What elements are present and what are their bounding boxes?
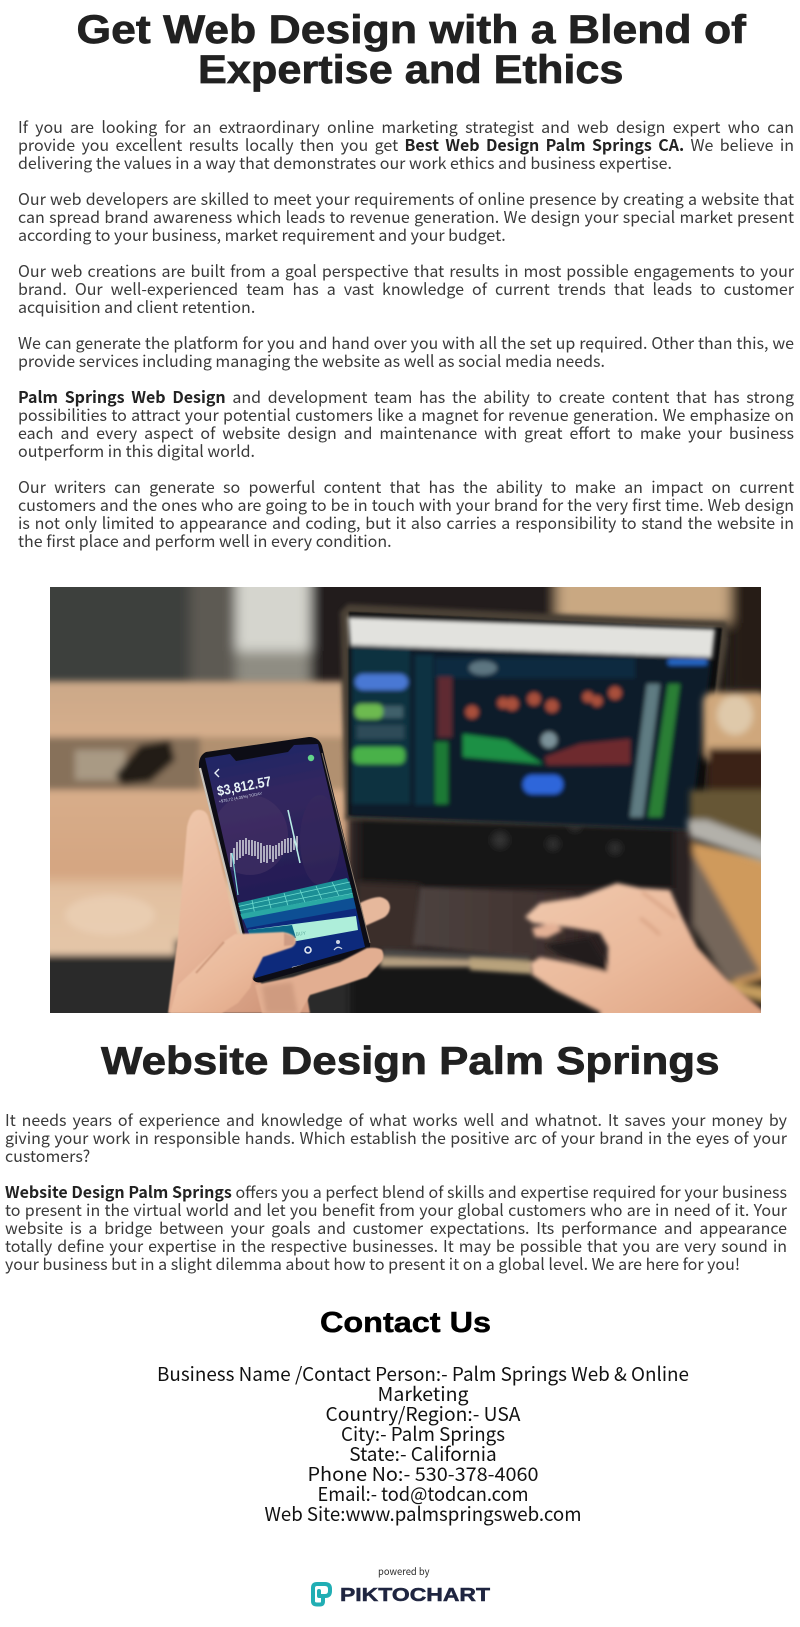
paragraph: writers — [18, 474, 794, 552]
phone screen details — [205, 744, 365, 978]
contact details: Web Site:www.palmspringsweb.com — [264, 1500, 582, 1527]
paragraph: web creations: Our web creations are built from a goal perspective that results in most possible engagements to your — [18, 258, 794, 282]
contact details: Phone No:- 530-378-4060 — [308, 1460, 538, 1487]
thumb and fingers — [170, 932, 384, 1013]
paragraph: writers: customers and the ones who are going to be in touch with your brand for the very first time. Web design — [18, 492, 794, 516]
paragraph: intro: delivering the values in a way that demonstrates our work ethics and business expertise. — [18, 150, 672, 174]
paragraph: palm springs web design: Palm Springs Web Design and development team has the ability to create content that has strong — [18, 384, 794, 408]
right hand — [525, 883, 765, 1020]
title: Expertise and Ethics — [198, 48, 624, 92]
photo background — [30, 567, 780, 1025]
phone: +$78,72 (4.35%) TODAY — [218, 791, 263, 804]
paragraph: web developers: can spread brand awareness which leads to revenue generation. We design your special market present — [18, 204, 794, 228]
icon: piktochart mark — [313, 1584, 330, 1604]
paragraph: intro: If you are looking for an extraordinary online marketing strategist and web design expert who can — [18, 114, 794, 138]
paragraph: perfect blend — [5, 1179, 787, 1275]
paragraph: perfect blend: totally define your expertise in the respective businesses. It may be possible that you are very sound in — [5, 1233, 787, 1257]
jar and silver device — [687, 692, 775, 866]
photo: phone with trading app in front of laptop — [50, 587, 761, 1013]
paragraph: web developers: Our web developers are skilled to meet your requirements of online presence by creating a website that — [18, 186, 794, 210]
powered by piktochart logo: powered by — [378, 1563, 430, 1578]
phone: BUY — [295, 931, 307, 938]
paragraph: web developers — [18, 186, 794, 246]
title: Get Web Design with a Blend of — [76, 8, 747, 52]
contact details — [157, 1360, 689, 1527]
contact details: State:- California — [349, 1440, 497, 1467]
paragraph: perfect blend: your business but in a slight dilemma about how to present it on a global level. We are here for you! — [5, 1251, 740, 1275]
heading: contact us: Contact Us — [320, 1307, 491, 1339]
paragraph: palm springs web design: possibilities to attract your potential customers like a magnet for revenue generation. We emphasize on — [18, 402, 794, 426]
contact details: City:- Palm Springs — [341, 1420, 505, 1447]
heading: website design palm springs: Website Design Palm Springs — [101, 1040, 720, 1083]
contact details: Email:- tod@todcan.com — [318, 1480, 528, 1507]
paragraph: web creations — [18, 258, 794, 318]
powered by piktochart logo: PIKTOCHART — [340, 1584, 491, 1605]
paragraph: writers: the first place and perform well in every condition. — [18, 528, 392, 552]
paragraph: perfect blend: website is a bridge between your goals and customer expectations. Its performance and appearance — [5, 1215, 787, 1239]
paragraph: web creations: brand. Our well-experienced team has a vast knowledge of current trends that leads to customer — [18, 276, 794, 300]
paragraph: perfect blend: Website Design Palm Springs offers you a perfect blend of skills and expertise required for your business — [5, 1179, 787, 1203]
paragraph: web creations: acquisition and client retention. — [18, 294, 255, 318]
title — [76, 8, 747, 92]
paragraph: palm springs web design: outperform in this digital world. — [18, 438, 255, 462]
paragraph: platform: We can generate the platform for you and hand over you with all the set up required. Other than this, we — [18, 330, 794, 354]
contact details: Business Name /Contact Person:- Palm Springs Web & Online — [157, 1360, 689, 1387]
paragraph: intro: provide you excellent results locally then you get Best Web Design Palm Springs CA. We believe in — [18, 132, 794, 156]
paragraph: platform — [18, 330, 794, 372]
paragraph: writers: is not only limited to appearance and coding, but it also carries a responsibility to stand the website in — [18, 510, 794, 534]
contact details: Marketing — [378, 1380, 469, 1407]
paragraph: palm springs web design — [18, 384, 794, 462]
phone — [198, 737, 370, 982]
left hand back — [168, 810, 390, 1013]
paragraph: writers: Our writers can generate so powerful content that has the ability to make an impact on current — [18, 474, 794, 498]
contact details: Country/Region:- USA — [326, 1400, 521, 1427]
paragraph: years of experience: giving your work in responsible hands. Which establish the positive arc of your brand in the eyes of your — [5, 1125, 787, 1149]
phone: $3,812.57 — [216, 773, 273, 799]
paragraph: intro — [18, 114, 794, 174]
paragraph: years of experience: customers? — [5, 1143, 90, 1167]
paragraph: years of experience: It needs years of experience and knowledge of what works well and whatnot. It saves your money by — [5, 1107, 787, 1131]
paragraph: platform: provide services including managing the website as well as social media needs. — [18, 348, 605, 372]
paragraph: web developers: according to your business, market requirement and your budget. — [18, 222, 506, 246]
paragraph: palm springs web design: each and every aspect of website design and maintenance with great effort to make your business — [18, 420, 794, 444]
laptop — [340, 604, 775, 1030]
table surface — [30, 681, 370, 1025]
paragraph: perfect blend: to present in the virtual world and let you benefit from your global customers who are in need of it. Your — [5, 1197, 787, 1221]
powered by piktochart logo — [311, 1563, 491, 1606]
paragraph: years of experience — [5, 1107, 787, 1167]
